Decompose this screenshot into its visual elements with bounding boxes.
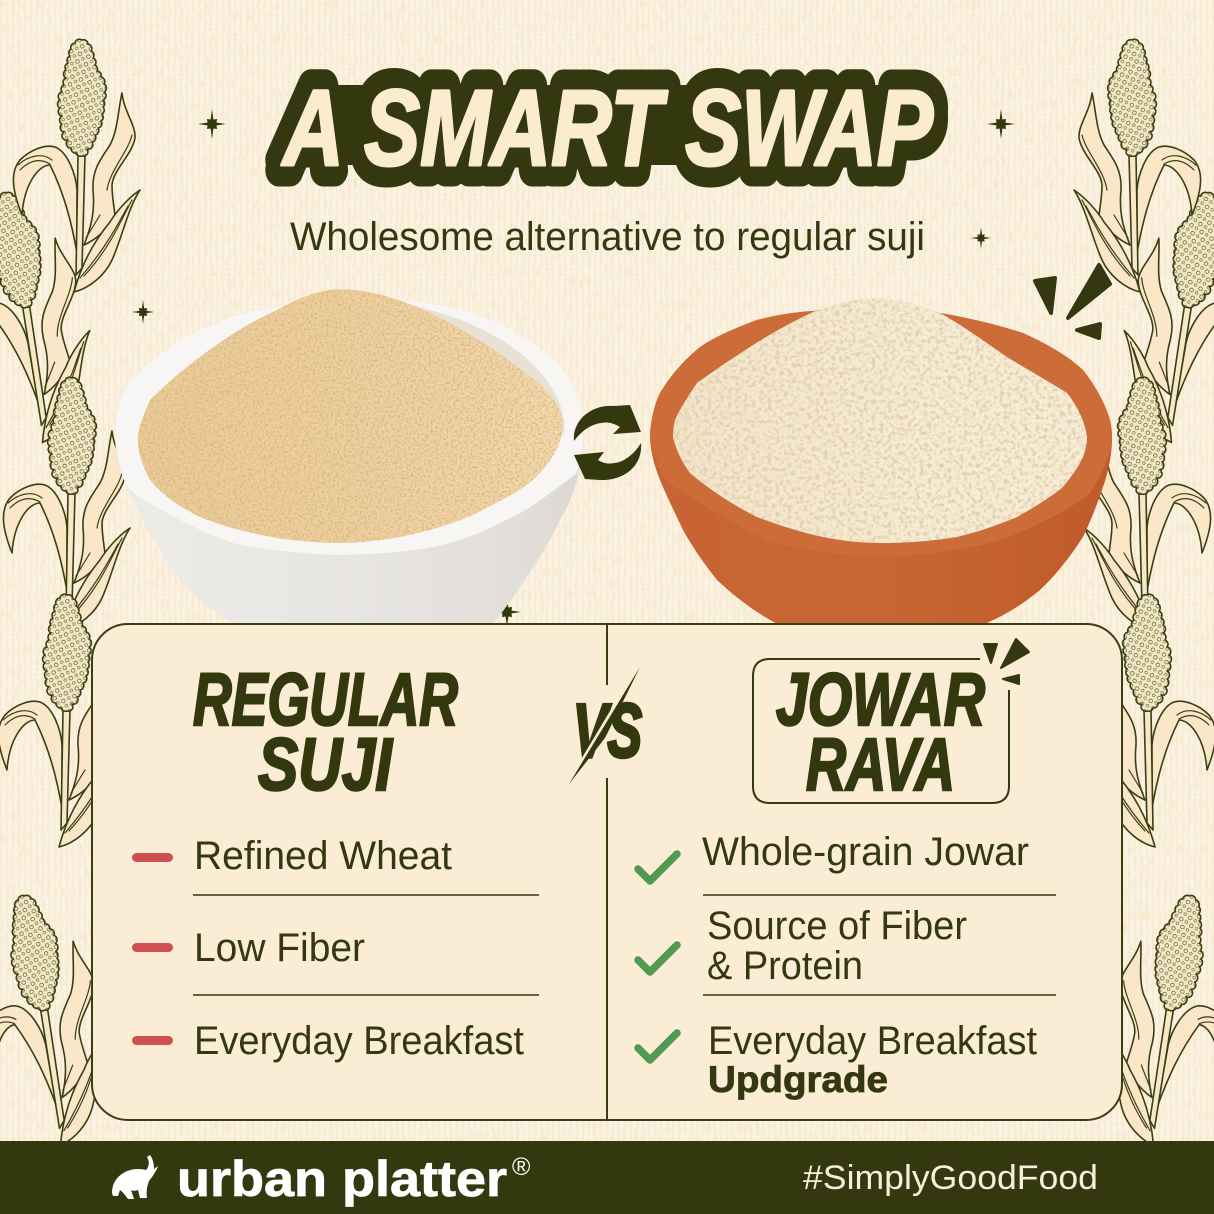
subtitle: Wholesome alternative to regular suji [290,215,925,259]
title badge: A SMART SWAP [278,62,936,183]
powder: jowar mound [673,298,1087,543]
heading: jowar rava [753,639,1029,806]
plants: right border [1074,39,1214,1156]
heading: regular suji [193,658,458,806]
row: everyday breakfast upgrade: Updgrade [708,1059,888,1100]
icon: swap arrows [574,405,641,480]
heading: jowar rava: RAVA [806,723,955,806]
row: source of fiber and protein: Source of Fiber [707,904,967,948]
row: source of fiber and protein: & Protein [707,944,863,988]
title badge: A SMART SWAP [278,72,936,193]
heading: regular suji: SUJI [258,723,393,806]
heading: jowar rava: JOWAR [776,658,985,741]
plants: left border [0,39,140,1156]
hashtag: #SimplyGoodFood [803,1159,1098,1197]
burst marks: jowar bowl [1035,265,1110,338]
vs badge: VS [573,689,642,774]
bowl rim: jowar rava [650,305,1112,557]
footer bar [0,1141,1214,1214]
row: source of fiber and protein [638,904,967,988]
bowl rim: regular suji [115,298,583,555]
title badge: A SMART SWAP [281,67,934,188]
powder: suji mound [138,289,563,543]
panel: comparison [92,624,1122,1120]
heading: regular suji: REGULAR [193,658,458,741]
icon: elephant logo [112,1155,158,1199]
row: everyday breakfast upgrade [638,1019,1037,1100]
row: everyday breakfast upgrade: Everyday Breakfast [708,1019,1037,1063]
brand name: urban platter [177,1151,507,1207]
row: whole-grain jowar: Whole-grain Jowar [702,830,1029,874]
list: regular suji [132,834,539,1063]
registered mark: ® [512,1153,531,1181]
bowl: jowar rava [650,298,1112,624]
bowl: regular suji [115,289,583,624]
sparkles [132,109,1015,627]
row: refined wheat: Refined Wheat [194,834,452,878]
list: jowar rava [638,830,1056,1100]
row: low fiber: Low Fiber [194,926,365,970]
row: everyday breakfast: Everyday Breakfast [194,1019,524,1063]
vs badge [569,667,642,784]
